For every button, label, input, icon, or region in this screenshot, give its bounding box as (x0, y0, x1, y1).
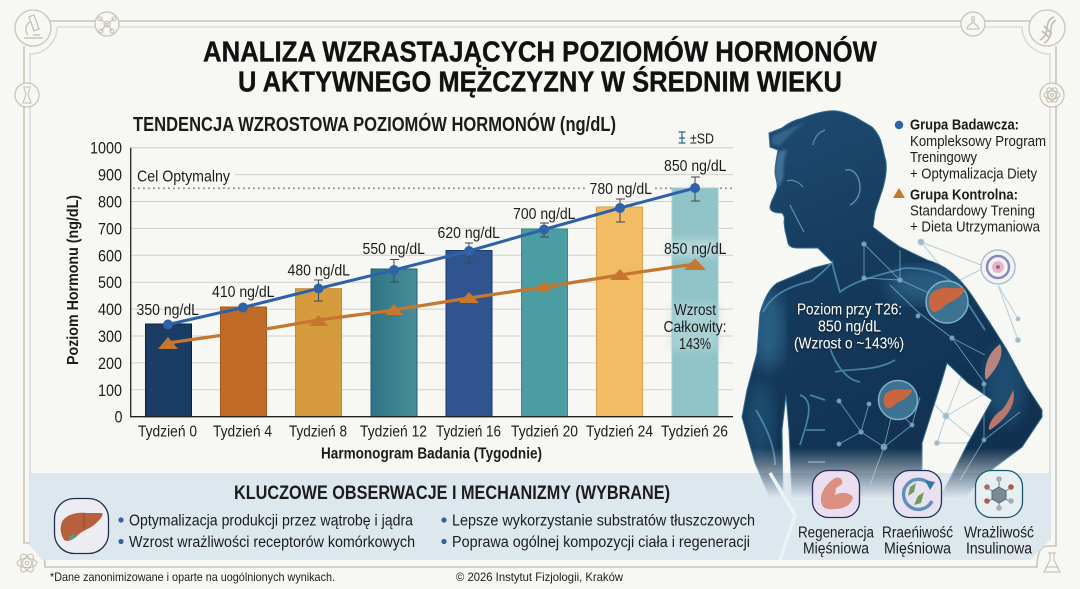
x axis labels: Tydzień 0 (138, 424, 197, 440)
bottom panel: key observations background (30, 473, 1050, 560)
y axis tick labels (90, 140, 122, 427)
data labels: 480 ng/dL (288, 262, 350, 279)
data labels: 850 ng/dL (664, 158, 727, 175)
y axis tick labels: 600 (98, 247, 122, 265)
footnote: *Dane zanonimizowane i oparte na uogólnionych wynikach. (50, 570, 335, 584)
panel: key observations (54, 483, 755, 554)
chart axes (131, 148, 733, 417)
body callout text: Poziom przy T26: (797, 302, 902, 318)
y axis tick labels: 300 (98, 328, 122, 346)
icon: flask top (967, 17, 979, 29)
data labels: 700 ng/dL (513, 206, 576, 223)
data labels (136, 158, 727, 319)
total growth note: Całkowity: (664, 319, 726, 336)
benefit: muscle regeneration: Regeneracja (798, 524, 874, 542)
control group entry (893, 186, 1041, 236)
x axis title: Harmonogram Badania (Tygodnie) (321, 446, 542, 462)
chart: hormone level trend (65, 112, 733, 462)
icon: atom top right (1044, 86, 1060, 104)
SD legend: ±SD (690, 130, 714, 148)
icon: flask bottom right (1044, 553, 1060, 572)
data labels: 350 ng/dL (136, 302, 199, 319)
icon: cycle target on shoulder network (981, 250, 1015, 284)
x axis labels: Tydzień 16 (436, 424, 501, 440)
control group line (158, 258, 706, 349)
research group entry: Kompleksowy Program (910, 133, 1046, 150)
panel heading: KLUCZOWE OBSERWACJE I MECHANIZMY (WYBRANE) (234, 483, 670, 504)
y axis tick labels: 500 (98, 274, 122, 292)
benefit: muscle regeneration (798, 470, 874, 558)
observation bullets left (118, 512, 415, 551)
control final label with glow: 850 ng/dL (664, 241, 727, 258)
data labels: 620 ng/dL (438, 225, 500, 242)
total growth note (664, 302, 726, 353)
body callout text: (Wzrost o ~143%) (794, 336, 904, 352)
observation bullets right: Lepsze wykorzystanie substratów tłuszczowych (452, 512, 755, 530)
body silhouette (742, 111, 1042, 498)
x axis labels: Tydzień 12 (360, 424, 427, 440)
research group entry: Treningowy (910, 149, 977, 166)
icon: liver badge (54, 498, 108, 554)
optimal target line (133, 187, 733, 189)
benefit: muscle responsiveness: Mięśniowa (884, 540, 951, 558)
x axis labels: Tydzień 4 (213, 424, 272, 440)
SD legend (678, 130, 714, 148)
copyright: © 2026 Instytut Fizjologii, Kraków (456, 570, 623, 584)
x axis labels: Tydzień 24 (586, 424, 653, 440)
chart heading: TENDENCJA WZROSTOWA POZIOMÓW HORMONÓW (ng/dL) (133, 112, 616, 136)
title: ANALIZA WZRASTAJĄCYCH POZIOMÓW HORMONÓW (203, 34, 878, 68)
icon: microscope (24, 15, 43, 38)
observation bullets right (441, 512, 755, 551)
observation bullets left: Optymalizacja produkcji przez wątrobę i jądra (129, 512, 413, 530)
y axis tick labels: 200 (98, 355, 122, 373)
y axis tick labels: 800 (98, 194, 122, 212)
x axis labels: Tydzień 20 (511, 424, 578, 440)
x axis labels: Tydzień 26 (661, 424, 728, 440)
y axis tick labels: 1000 (90, 140, 122, 158)
network lines behind the figure (918, 239, 1020, 446)
benefit: insulin sensitivity (964, 470, 1034, 558)
observation bullets left: Wzrost wrażliwości receptorów komórkowych (129, 534, 415, 551)
icon: liver on shoulder (926, 281, 968, 323)
x axis labels (138, 424, 728, 440)
benefit: insulin sensitivity: Insulinowa (966, 540, 1032, 558)
legend: study groups (893, 116, 1046, 236)
total growth note: Wzrost (674, 302, 716, 319)
icon: molecule (98, 17, 116, 33)
benefit: muscle responsiveness (882, 470, 953, 558)
control group entry: Grupa Kontrolna: (910, 186, 1018, 204)
control group entry: + Dieta Utrzymaniowa (910, 218, 1041, 236)
y axis tick labels: 900 (98, 167, 122, 185)
icon: hourglass (23, 87, 31, 103)
human figure illustration (742, 111, 1042, 498)
data labels: 410 ng/dL (212, 284, 275, 301)
body callout text (794, 302, 904, 352)
y axis tick labels: 0 (114, 409, 122, 427)
title (203, 34, 878, 98)
chevron divider (770, 473, 795, 560)
target label: Cel Optymalny (137, 168, 230, 186)
y axis tick labels: 400 (98, 301, 122, 319)
research group entry (895, 116, 1046, 182)
icon: forearm muscle (989, 390, 1014, 430)
error bars (314, 177, 700, 301)
y axis title: Poziom Hormonu (ng/dL) (65, 195, 82, 365)
icon: liver on abdomen (878, 380, 918, 420)
icon: upper arm muscle (985, 344, 1001, 380)
bars (146, 188, 718, 417)
control group entry: Standardowy Trening (910, 202, 1035, 220)
data labels: 780 ng/dL (590, 181, 652, 198)
body shading and highlights (746, 123, 1025, 485)
icon: atom bottom left (17, 552, 37, 574)
y axis tick labels: 700 (98, 220, 122, 238)
body callout text: 850 ng/dL (818, 318, 881, 336)
benefit: insulin sensitivity: Wrażliwość (964, 524, 1034, 542)
observation bullets right: Poprawa ogólnej kompozycji ciała i regeneracji (452, 534, 750, 551)
x axis labels: Tydzień 8 (289, 424, 347, 440)
icon: dna (1040, 17, 1056, 43)
y axis tick labels: 100 (98, 382, 122, 400)
gridlines (131, 148, 733, 390)
benefit: muscle responsiveness: Rraeńiwość (882, 524, 953, 542)
benefit: muscle regeneration: Mięśniowa (803, 540, 869, 558)
research group entry: + Optymalizacja Diety (910, 166, 1037, 182)
total growth note: 143% (679, 336, 711, 353)
research group entry: Grupa Badawcza: (910, 116, 1019, 134)
research group line (163, 183, 700, 330)
title: U AKTYWNEGO MĘŻCZYZNY W ŚREDNIM WIEKU (238, 64, 842, 98)
data labels: 550 ng/dL (362, 241, 425, 258)
